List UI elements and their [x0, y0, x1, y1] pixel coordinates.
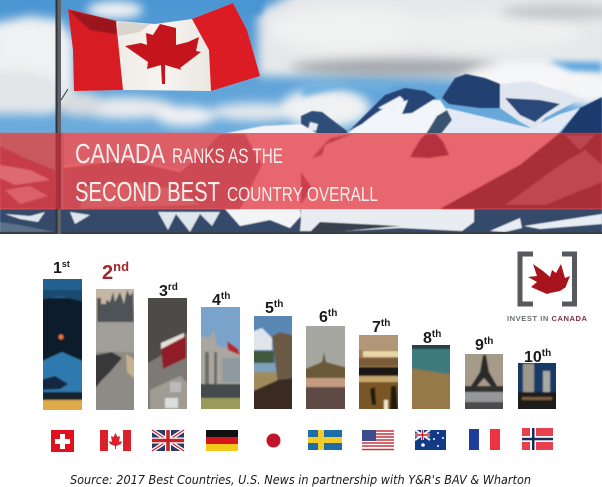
rank labels: 4 — [212, 292, 221, 309]
flag: Australia — [415, 430, 446, 450]
bar 3: United Kingdom photo — [148, 298, 187, 409]
flag: United Kingdom — [152, 430, 184, 451]
bar 9: France photo — [465, 354, 503, 409]
translucent red title band — [0, 133, 602, 209]
rank labels: 7 — [372, 319, 381, 336]
flag: United States — [362, 430, 394, 451]
rank labels: th — [542, 348, 551, 359]
rank labels: 10 — [524, 349, 542, 366]
rank labels: th — [484, 336, 493, 347]
title: SECOND BEST — [75, 176, 220, 207]
rank labels: 6 — [319, 309, 328, 326]
flag: Canada — [100, 430, 131, 451]
Canadian flag — [68, 3, 260, 91]
bar 8: Australia photo — [412, 345, 450, 409]
rank labels: th — [381, 318, 390, 329]
title: RANKS AS THE — [172, 145, 283, 168]
bar 7: United States photo — [359, 335, 398, 409]
flag: France — [469, 429, 500, 450]
icon: red maple leaf — [528, 264, 570, 294]
source note: Source: 2017 Best Countries, U.S. News in partnership with Y&R's BAV & Wharton — [70, 473, 531, 487]
maple leaf — [125, 24, 201, 84]
bar 2: Canada photo — [96, 289, 134, 410]
flag pole — [56, 0, 68, 234]
rank labels: st — [62, 259, 70, 269]
rank labels: 1 — [53, 260, 62, 277]
bar 1: Switzerland photo — [43, 279, 82, 410]
flag: Switzerland — [51, 430, 74, 452]
bar 4: Germany photo — [201, 307, 240, 409]
rank labels: 5 — [265, 300, 274, 317]
rank labels: 2 — [102, 262, 113, 284]
mountains — [222, 74, 602, 134]
flag: Sweden — [308, 430, 342, 450]
hero photo: sky, clouds and snowy mountains — [0, 0, 602, 234]
bar 6: Sweden photo — [306, 326, 345, 409]
rank labels: 9 — [475, 337, 484, 354]
logo: Invest in Canada: INVEST IN CANADA — [507, 314, 588, 323]
rank labels: nd — [113, 259, 129, 274]
title — [75, 138, 378, 207]
flag: Japan — [258, 430, 290, 451]
clouds — [0, 0, 602, 128]
rank labels: th — [432, 329, 441, 340]
rank labels: 8 — [423, 330, 432, 347]
lower snowy ridge — [0, 209, 602, 234]
rank labels: 3 — [159, 283, 168, 300]
blue sky gaps — [240, 0, 602, 97]
title: CANADA — [75, 138, 165, 169]
flag: Norway — [522, 428, 553, 450]
rank labels: th — [221, 291, 230, 302]
flag: Germany — [206, 430, 238, 451]
rank labels: th — [274, 299, 283, 310]
logo: Invest in Canada — [507, 254, 588, 323]
rank labels: th — [328, 308, 337, 319]
rank labels: rd — [168, 282, 178, 293]
bar 10: Norway photo — [518, 363, 556, 409]
title: COUNTRY OVERALL — [227, 184, 378, 206]
rank labels — [53, 259, 551, 366]
bar 5: Japan photo — [254, 316, 292, 409]
